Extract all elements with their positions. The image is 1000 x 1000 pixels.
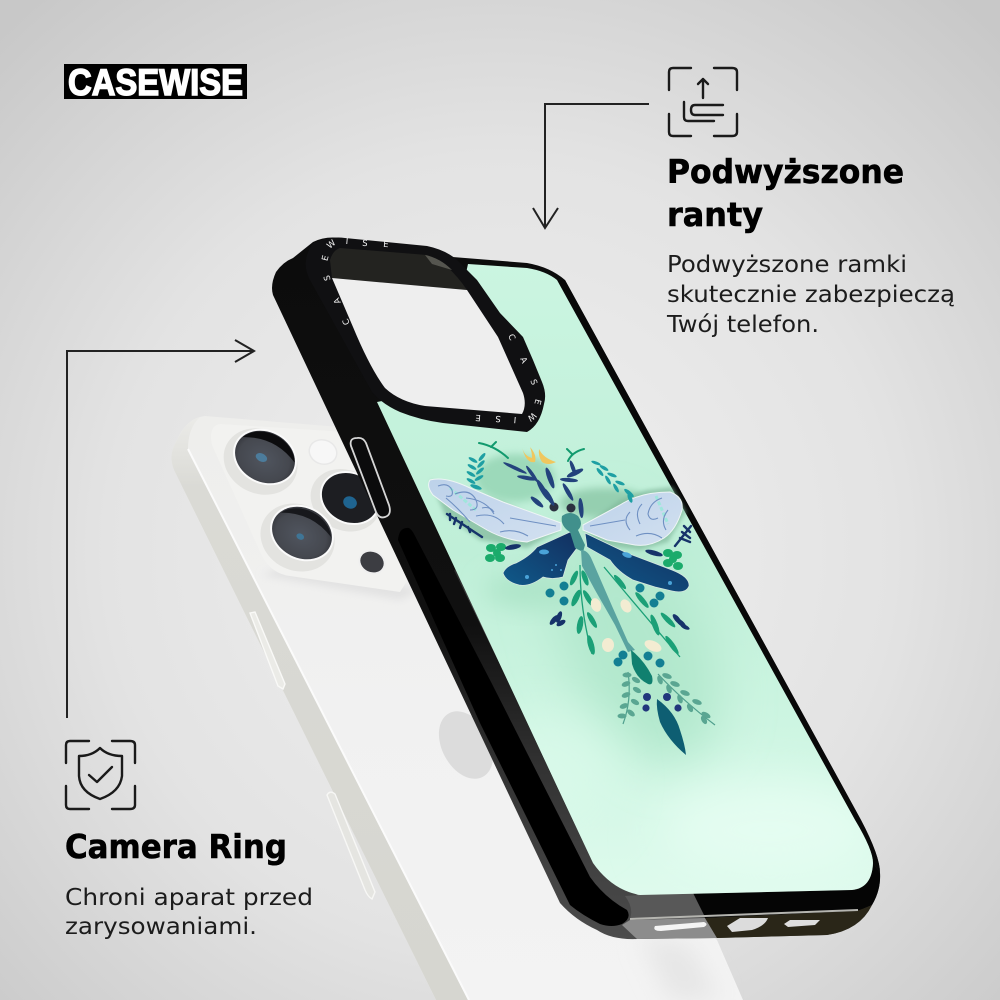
navy side leaves [505, 543, 690, 631]
black case [272, 238, 880, 939]
ring bevel [425, 255, 452, 270]
ring lettering: E [475, 412, 481, 422]
teal ferns [466, 452, 635, 503]
port speaker [654, 922, 706, 931]
ring lettering [320, 237, 543, 424]
wing swirls [438, 485, 668, 538]
watercolor wash [554, 537, 727, 770]
upper left wing [429, 479, 561, 542]
heading: raised edges: Podwyższone [667, 152, 904, 191]
bottom port strip [705, 905, 872, 938]
phone body [171, 416, 743, 1000]
white phone [171, 415, 743, 1000]
ring lettering: E [383, 240, 389, 250]
upper right wing [583, 492, 682, 545]
arrow: to camera ring [67, 340, 254, 718]
flash [306, 436, 340, 468]
arrow: to raised edges [533, 104, 649, 228]
lower shading [640, 935, 720, 1000]
logo: CASEWISE [68, 62, 243, 103]
camera plate shadow [262, 560, 420, 600]
dragonfly tail [631, 650, 652, 684]
ring lettering: S [322, 274, 333, 282]
ring lettering: S [527, 378, 539, 387]
icon: shield [66, 741, 135, 809]
ring lettering: A [517, 356, 529, 365]
phone side rim [171, 417, 468, 1000]
screen edge highlight [455, 570, 640, 895]
side button on case [351, 438, 390, 517]
heading: camera ring: Camera Ring [65, 827, 287, 866]
heading: raised edges [667, 152, 904, 234]
bottom black band [693, 863, 880, 918]
side buttons [250, 612, 285, 689]
highlight line [630, 910, 858, 919]
side green flowers [485, 543, 683, 570]
camera lens 2 [300, 458, 391, 543]
dragonfly illustration [429, 442, 715, 755]
navy stars [642, 693, 682, 712]
text: camera ring description: Chroni aparat przed [65, 885, 313, 911]
camera plate [211, 424, 420, 592]
bottom grey band [625, 893, 705, 919]
ring lettering: C [341, 317, 353, 326]
camera lens 1 [212, 415, 309, 507]
ring frame [306, 238, 545, 432]
cream flowers [589, 597, 663, 654]
grey green sprigs [623, 672, 715, 725]
lower left wing [503, 532, 577, 585]
small teal flowers [546, 582, 664, 668]
ring opening [332, 278, 525, 414]
text: camera ring description: zarysowaniami. [65, 914, 257, 940]
text: raised edges description: Podwyższone ramki [667, 252, 907, 278]
crescent moons [522, 447, 535, 462]
dragonfly eyes [550, 502, 558, 512]
camera ring [306, 237, 545, 432]
ring lettering: C [505, 333, 517, 342]
ring lettering: S [495, 413, 501, 423]
ring lettering: E [532, 398, 543, 406]
wing mint pattern [450, 488, 668, 524]
navy antler leaves [502, 460, 584, 518]
right edge [557, 280, 880, 873]
port mic [784, 920, 820, 927]
text: raised edges description [666, 252, 955, 338]
heading: raised edges: ranty [667, 195, 763, 234]
icon: raised edges [669, 68, 737, 136]
apple logo [428, 702, 504, 788]
text: camera ring description [65, 885, 313, 940]
port usb [727, 918, 768, 932]
case body [272, 238, 880, 939]
large teal leaf [657, 699, 686, 755]
wing spots [525, 550, 672, 585]
ring inner wall [330, 248, 467, 290]
navy sprigs [447, 514, 691, 546]
central green sprigs [580, 565, 680, 657]
text: raised edges description: Twój telefon. [666, 312, 819, 338]
ring lettering: E [320, 254, 331, 262]
wing shadows [430, 480, 686, 550]
camera lens 3 [249, 491, 346, 584]
lidar sensor [356, 547, 388, 577]
text: raised edges description: skutecznie zabezpieczą [667, 282, 955, 308]
top green sprigs [479, 442, 584, 461]
ring lettering: W [524, 410, 538, 423]
case inner slot [398, 528, 629, 926]
ring lettering: A [332, 296, 344, 305]
ring lettering: I [345, 237, 349, 247]
dragonfly body [562, 513, 585, 552]
ring lettering: I [513, 414, 517, 424]
phone screen artwork [370, 260, 890, 910]
rim highlight [188, 449, 469, 1000]
dragonfly abdomen [581, 550, 635, 652]
ring lettering: W [325, 238, 339, 251]
lower right wing [585, 533, 689, 592]
bottom left translucent strip [622, 918, 717, 939]
screen base [370, 260, 890, 910]
ring lettering: S [362, 239, 368, 249]
